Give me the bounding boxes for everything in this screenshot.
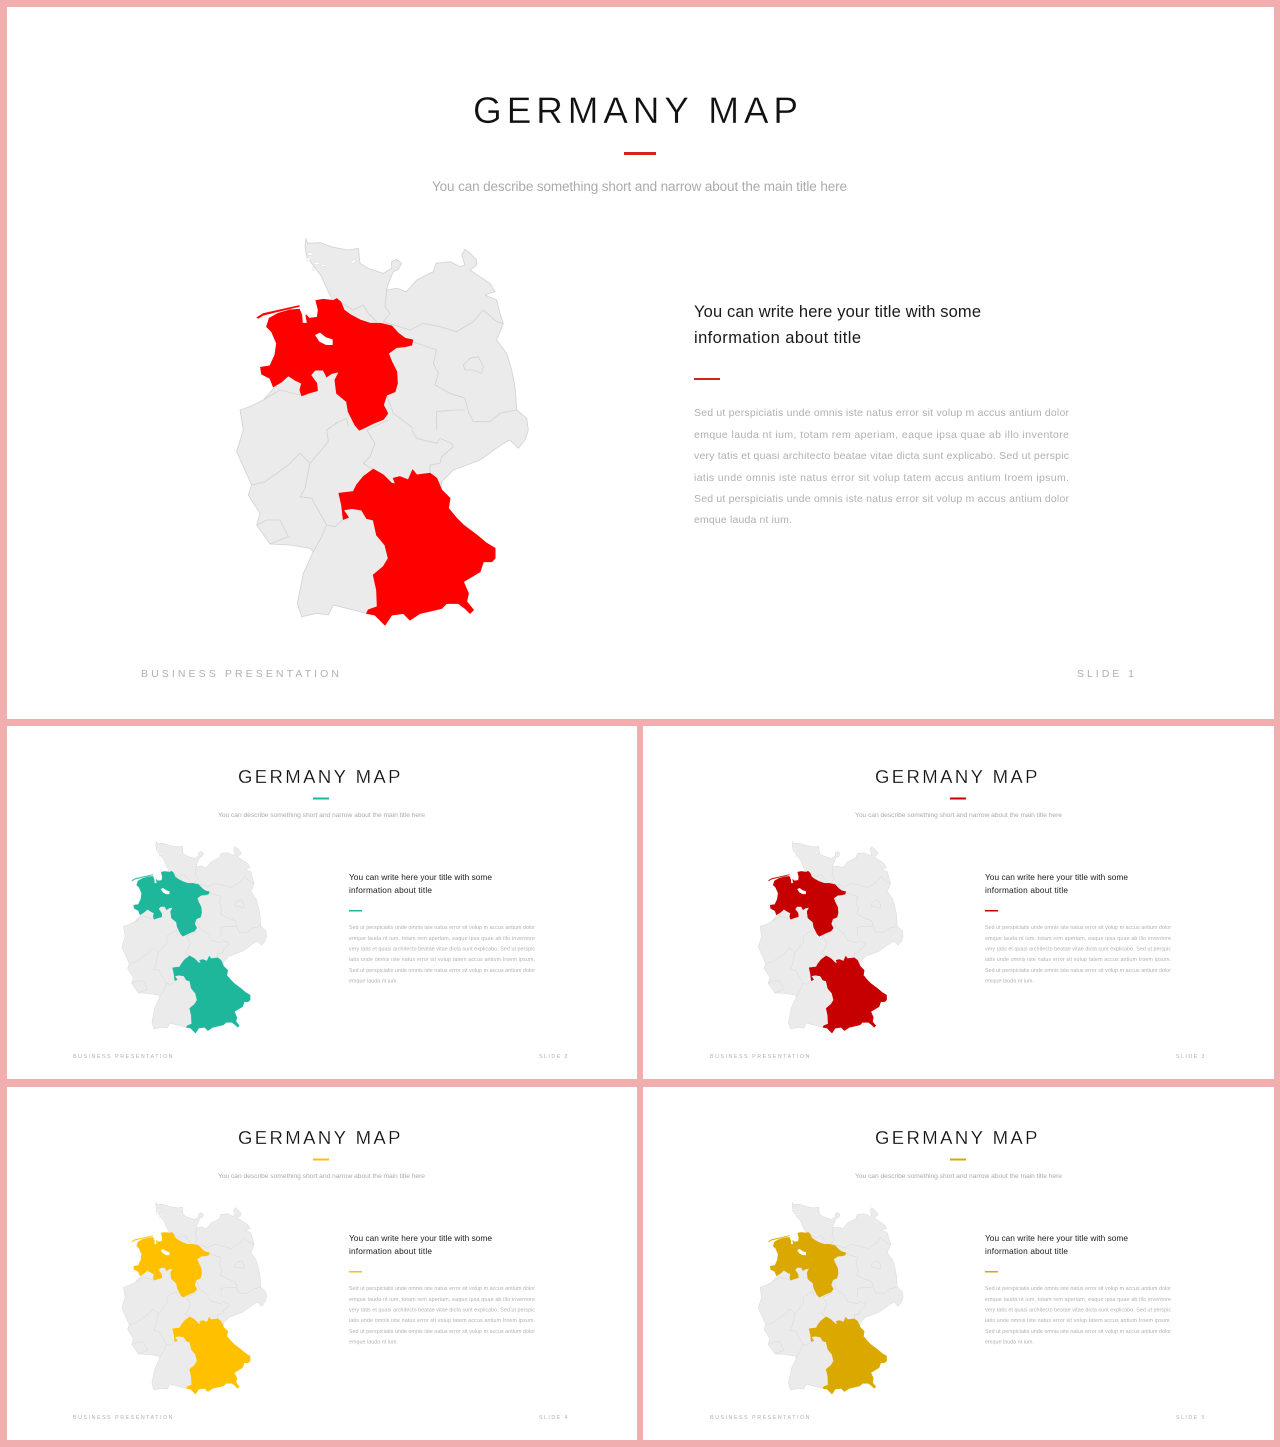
title accent bar <box>950 798 966 800</box>
panel: slide 4 <box>7 1087 637 1440</box>
body text: emque lauda nt ium. <box>985 1340 1034 1346</box>
subtitle: You can describe something short and narrow about the main title here <box>855 812 1062 819</box>
subtitle: You can describe something short and narrow about the main title here <box>855 1173 1062 1180</box>
slide number: SLIDE 4 <box>539 1415 568 1421</box>
body text: emque lauda nt ium. <box>349 1340 398 1346</box>
title: GERMANY MAP <box>473 90 798 131</box>
body text: emque lauda nt ium, totam rem aperiam, eaque ipsa quae ab illo inventore <box>349 1297 535 1303</box>
footer label: BUSINESS PRESENTATION <box>73 1415 173 1421</box>
heading accent bar <box>985 910 998 912</box>
title: GERMANY MAP <box>875 766 1038 787</box>
footer label: BUSINESS PRESENTATION <box>710 1415 810 1421</box>
map of Germany with highlighted states <box>122 841 267 1033</box>
heading accent bar <box>694 378 720 380</box>
body text: Sed ut perspiciatis unde omnis iste natus error sit volup m accus antium dolor <box>985 968 1171 974</box>
body text: iatis unde omnis iste natus error sit volup tatem accus antium Iroem ipsum. <box>694 472 1069 484</box>
title: GERMANY MAP <box>875 1127 1038 1148</box>
title accent bar <box>313 798 329 800</box>
body text: emque lauda nt ium. <box>349 978 398 984</box>
body text: emque lauda nt ium, totam rem aperiam, eaque ipsa quae ab illo inventore <box>349 936 535 942</box>
body text: emque lauda nt ium, totam rem aperiam, eaque ipsa quae ab illo inventore <box>985 936 1171 942</box>
body text: very tatis et quasi architecto beatae vitae dicta sunt explicabo. Sed ut perspic <box>349 1308 535 1314</box>
panel: slide 2 <box>7 726 637 1079</box>
body text: iatis unde omnis iste natus error sit volup tatem accus antium Iroem ipsum. <box>985 957 1171 963</box>
body text: iatis unde omnis iste natus error sit volup tatem accus antium Iroem ipsum. <box>349 1318 535 1324</box>
body text: iatis unde omnis iste natus error sit volup tatem accus antium Iroem ipsum. <box>985 1318 1171 1324</box>
heading: You can write here your title with some <box>349 1233 492 1243</box>
panel: slide 5 <box>643 1087 1274 1440</box>
slide number: SLIDE 5 <box>1176 1415 1205 1421</box>
body text: Sed ut perspiciatis unde omnis iste natus error sit volup m accus antium dolor <box>349 925 535 931</box>
heading accent bar <box>985 1271 998 1272</box>
footer label: BUSINESS PRESENTATION <box>73 1054 173 1060</box>
map of Germany with highlighted states <box>122 1202 267 1394</box>
subtitle: You can describe something short and narrow about the main title here <box>218 812 425 819</box>
body text: emque lauda nt ium. <box>694 514 792 526</box>
heading: You can write here your title with some <box>985 872 1128 882</box>
map of Germany with highlighted states <box>758 1202 903 1394</box>
body text: Sed ut perspiciatis unde omnis iste natus error sit volup m accus antium dolor <box>349 1329 535 1335</box>
slide number: SLIDE 2 <box>539 1054 568 1060</box>
heading: information about title <box>349 1246 432 1256</box>
heading: You can write here your title with some <box>985 1233 1128 1243</box>
heading accent bar <box>349 910 362 912</box>
heading: You can write here your title with some <box>694 303 981 321</box>
slide number: SLIDE 1 <box>1077 668 1134 680</box>
body text: very tatis et quasi architecto beatae vitae dicta sunt explicabo. Sed ut perspic <box>985 1308 1171 1314</box>
title accent bar <box>950 1158 966 1160</box>
map of Germany with highlighted states <box>237 238 528 625</box>
heading: You can write here your title with some <box>349 872 492 882</box>
body text: Sed ut perspiciatis unde omnis iste natus error sit volup m accus antium dolor <box>349 968 535 974</box>
panel: slide 3 <box>643 726 1274 1079</box>
title: GERMANY MAP <box>238 766 400 787</box>
subtitle: You can describe something short and narrow about the main title here <box>218 1173 425 1180</box>
footer label: BUSINESS PRESENTATION <box>710 1054 810 1060</box>
subtitle: You can describe something short and narrow about the main title here <box>432 179 847 194</box>
heading: information about title <box>349 885 432 895</box>
body text: Sed ut perspiciatis unde omnis iste natus error sit volup m accus antium dolor <box>985 1286 1171 1292</box>
body text: very tatis et quasi architecto beatae vitae dicta sunt explicabo. Sed ut perspic <box>349 946 535 952</box>
heading: information about title <box>985 885 1068 895</box>
footer label: BUSINESS PRESENTATION <box>141 668 339 680</box>
title: GERMANY MAP <box>238 1127 400 1148</box>
body text: Sed ut perspiciatis unde omnis iste natus error sit volup m accus antium dolor <box>694 493 1070 505</box>
heading: information about title <box>694 329 861 347</box>
panel: slide 1 <box>7 7 1274 719</box>
body text: Sed ut perspiciatis unde omnis iste natus error sit volup m accus antium dolor <box>985 925 1171 931</box>
body text: emque lauda nt ium. <box>985 978 1034 984</box>
title accent bar <box>624 152 656 155</box>
body text: very tatis et quasi architecto beatae vitae dicta sunt explicabo. Sed ut perspic <box>694 450 1069 462</box>
body text: iatis unde omnis iste natus error sit volup tatem accus antium Iroem ipsum. <box>349 957 535 963</box>
heading: information about title <box>985 1246 1068 1256</box>
heading accent bar <box>349 1271 362 1272</box>
body text: emque lauda nt ium, totam rem aperiam, eaque ipsa quae ab illo inventore <box>694 429 1069 441</box>
body text: Sed ut perspiciatis unde omnis iste natus error sit volup m accus antium dolor <box>349 1286 535 1292</box>
body text: emque lauda nt ium, totam rem aperiam, eaque ipsa quae ab illo inventore <box>985 1297 1171 1303</box>
map of Germany with highlighted states <box>758 841 903 1033</box>
body text: Sed ut perspiciatis unde omnis iste natus error sit volup m accus antium dolor <box>694 407 1070 419</box>
title accent bar <box>313 1158 329 1160</box>
slide number: SLIDE 3 <box>1176 1054 1205 1060</box>
body text: Sed ut perspiciatis unde omnis iste natus error sit volup m accus antium dolor <box>985 1329 1171 1335</box>
body text: very tatis et quasi architecto beatae vitae dicta sunt explicabo. Sed ut perspic <box>985 946 1171 952</box>
